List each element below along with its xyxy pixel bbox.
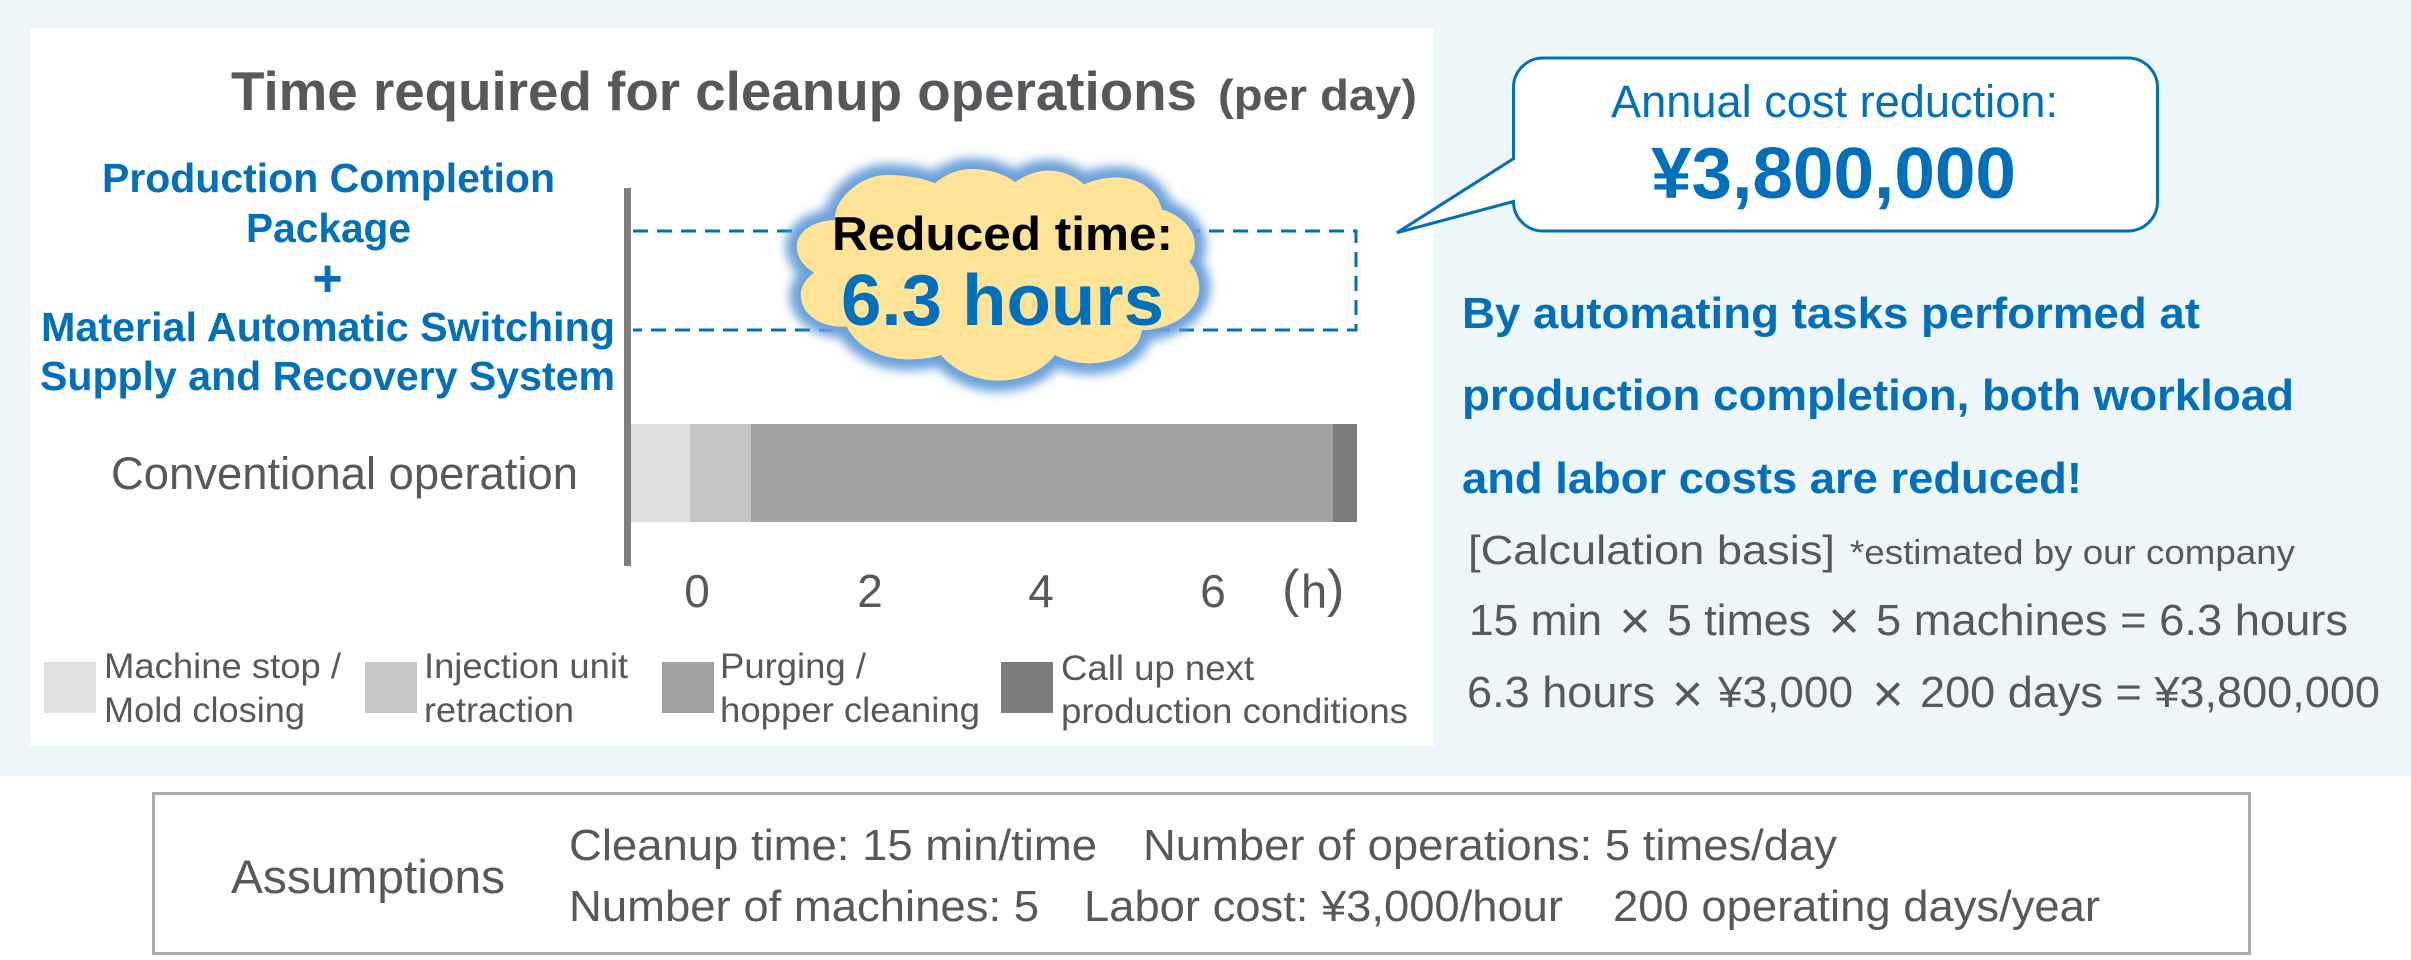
legend item: injection unit retraction: Injection unit bbox=[424, 647, 628, 686]
panel: cleanup time chart bbox=[30, 28, 1434, 746]
chart title: Time required for cleanup operations bbox=[231, 60, 1197, 122]
row label: production completion package plus switching system: Package bbox=[246, 205, 411, 251]
text block: automation benefit: production completion, both workload bbox=[1462, 371, 2294, 420]
text block: calculation basis: × bbox=[1872, 664, 1904, 724]
assumptions list: Labor cost: ¥3,000/hour bbox=[1084, 882, 1563, 931]
axis labels: 6 bbox=[1200, 565, 1226, 617]
text block: automation benefit: and labor costs are reduced! bbox=[1462, 454, 2082, 503]
legend item: call up next production conditions bbox=[1001, 649, 1408, 731]
text block: calculation basis: ¥3,000 bbox=[1717, 668, 1853, 717]
assumptions list: 200 operating days/year bbox=[1613, 882, 2100, 931]
callout: annual cost reduction bbox=[1397, 58, 2158, 233]
text block: calculation basis: 5 times bbox=[1667, 596, 1811, 645]
text block: calculation basis: × bbox=[1619, 591, 1651, 651]
legend item: purging / hopper cleaning: hopper cleaning bbox=[720, 691, 980, 730]
legend item: machine stop / mold closing: Mold closing bbox=[104, 691, 305, 730]
legend item: call up next production conditions: production conditions bbox=[1061, 692, 1408, 731]
axis labels: h bbox=[1301, 565, 1327, 618]
axis labels: ( bbox=[1282, 560, 1300, 618]
legend item: machine stop / mold closing bbox=[44, 647, 341, 730]
row label: production completion package plus switching system: Supply and Recovery System bbox=[40, 353, 615, 399]
legend bbox=[44, 647, 1408, 731]
text block: calculation basis: [Calculation basis] bbox=[1468, 527, 1835, 573]
legend item: call up next production conditions: Call up next bbox=[1061, 649, 1254, 688]
row label: production completion package plus switching system bbox=[40, 155, 615, 399]
callout: reduced time cloud: 6.3 hours bbox=[841, 261, 1164, 341]
text block: automation benefit: By automating tasks performed at bbox=[1462, 289, 2200, 338]
text block: calculation basis: × bbox=[1672, 664, 1703, 724]
row label: production completion package plus switching system: Production Completion bbox=[102, 155, 555, 201]
text block: calculation basis bbox=[1467, 527, 2380, 724]
text block: calculation basis: 5 machines = 6.3 hours bbox=[1876, 596, 2348, 645]
text block: calculation basis: *estimated by our company bbox=[1850, 534, 2295, 572]
axis labels: 0 bbox=[684, 565, 710, 617]
assumptions list: Number of machines: 5 bbox=[569, 882, 1039, 931]
legend item: injection unit retraction bbox=[365, 647, 628, 730]
assumptions heading: Assumptions bbox=[231, 850, 505, 903]
axis labels bbox=[684, 560, 1344, 618]
assumptions list: Number of operations: 5 times/day bbox=[1143, 821, 1837, 870]
axis labels: 2 bbox=[857, 565, 883, 617]
callout: annual cost reduction: Annual cost reduction: bbox=[1611, 76, 2058, 127]
row label: conventional operation: Conventional operation bbox=[111, 448, 578, 499]
legend item: machine stop / mold closing: Machine stop / bbox=[104, 647, 341, 686]
text block: calculation basis: 6.3 hours bbox=[1467, 668, 1655, 717]
chart axis bbox=[624, 188, 631, 566]
axis labels: ) bbox=[1327, 560, 1344, 618]
legend item: injection unit retraction: retraction bbox=[424, 691, 574, 730]
text block: calculation basis: 15 min bbox=[1469, 596, 1602, 645]
text block: calculation basis: × bbox=[1828, 591, 1860, 651]
callout: reduced time cloud: Reduced time: bbox=[832, 207, 1173, 260]
dashed box: reduced time range bbox=[633, 231, 1356, 330]
callout: reduced time cloud bbox=[797, 169, 1199, 381]
assumptions list: Cleanup time: 15 min/time bbox=[569, 821, 1097, 870]
row label: production completion package plus switching system: Material Automatic Switching bbox=[41, 304, 615, 350]
assumptions list bbox=[569, 821, 2100, 931]
row label: production completion package plus switching system: + bbox=[312, 250, 343, 308]
chart title: (per day) bbox=[1218, 71, 1417, 120]
callout: annual cost reduction: ¥3,800,000 bbox=[1651, 134, 2016, 214]
legend item: purging / hopper cleaning bbox=[662, 647, 980, 730]
text block: automation benefit bbox=[1462, 289, 2294, 503]
stacked bar: conventional operation bbox=[631, 424, 1357, 522]
axis labels: 4 bbox=[1028, 565, 1054, 617]
legend item: purging / hopper cleaning: Purging / bbox=[720, 647, 866, 686]
panel: assumptions bbox=[154, 794, 2250, 954]
text block: calculation basis: 200 days = ¥3,800,000 bbox=[1920, 668, 2380, 717]
